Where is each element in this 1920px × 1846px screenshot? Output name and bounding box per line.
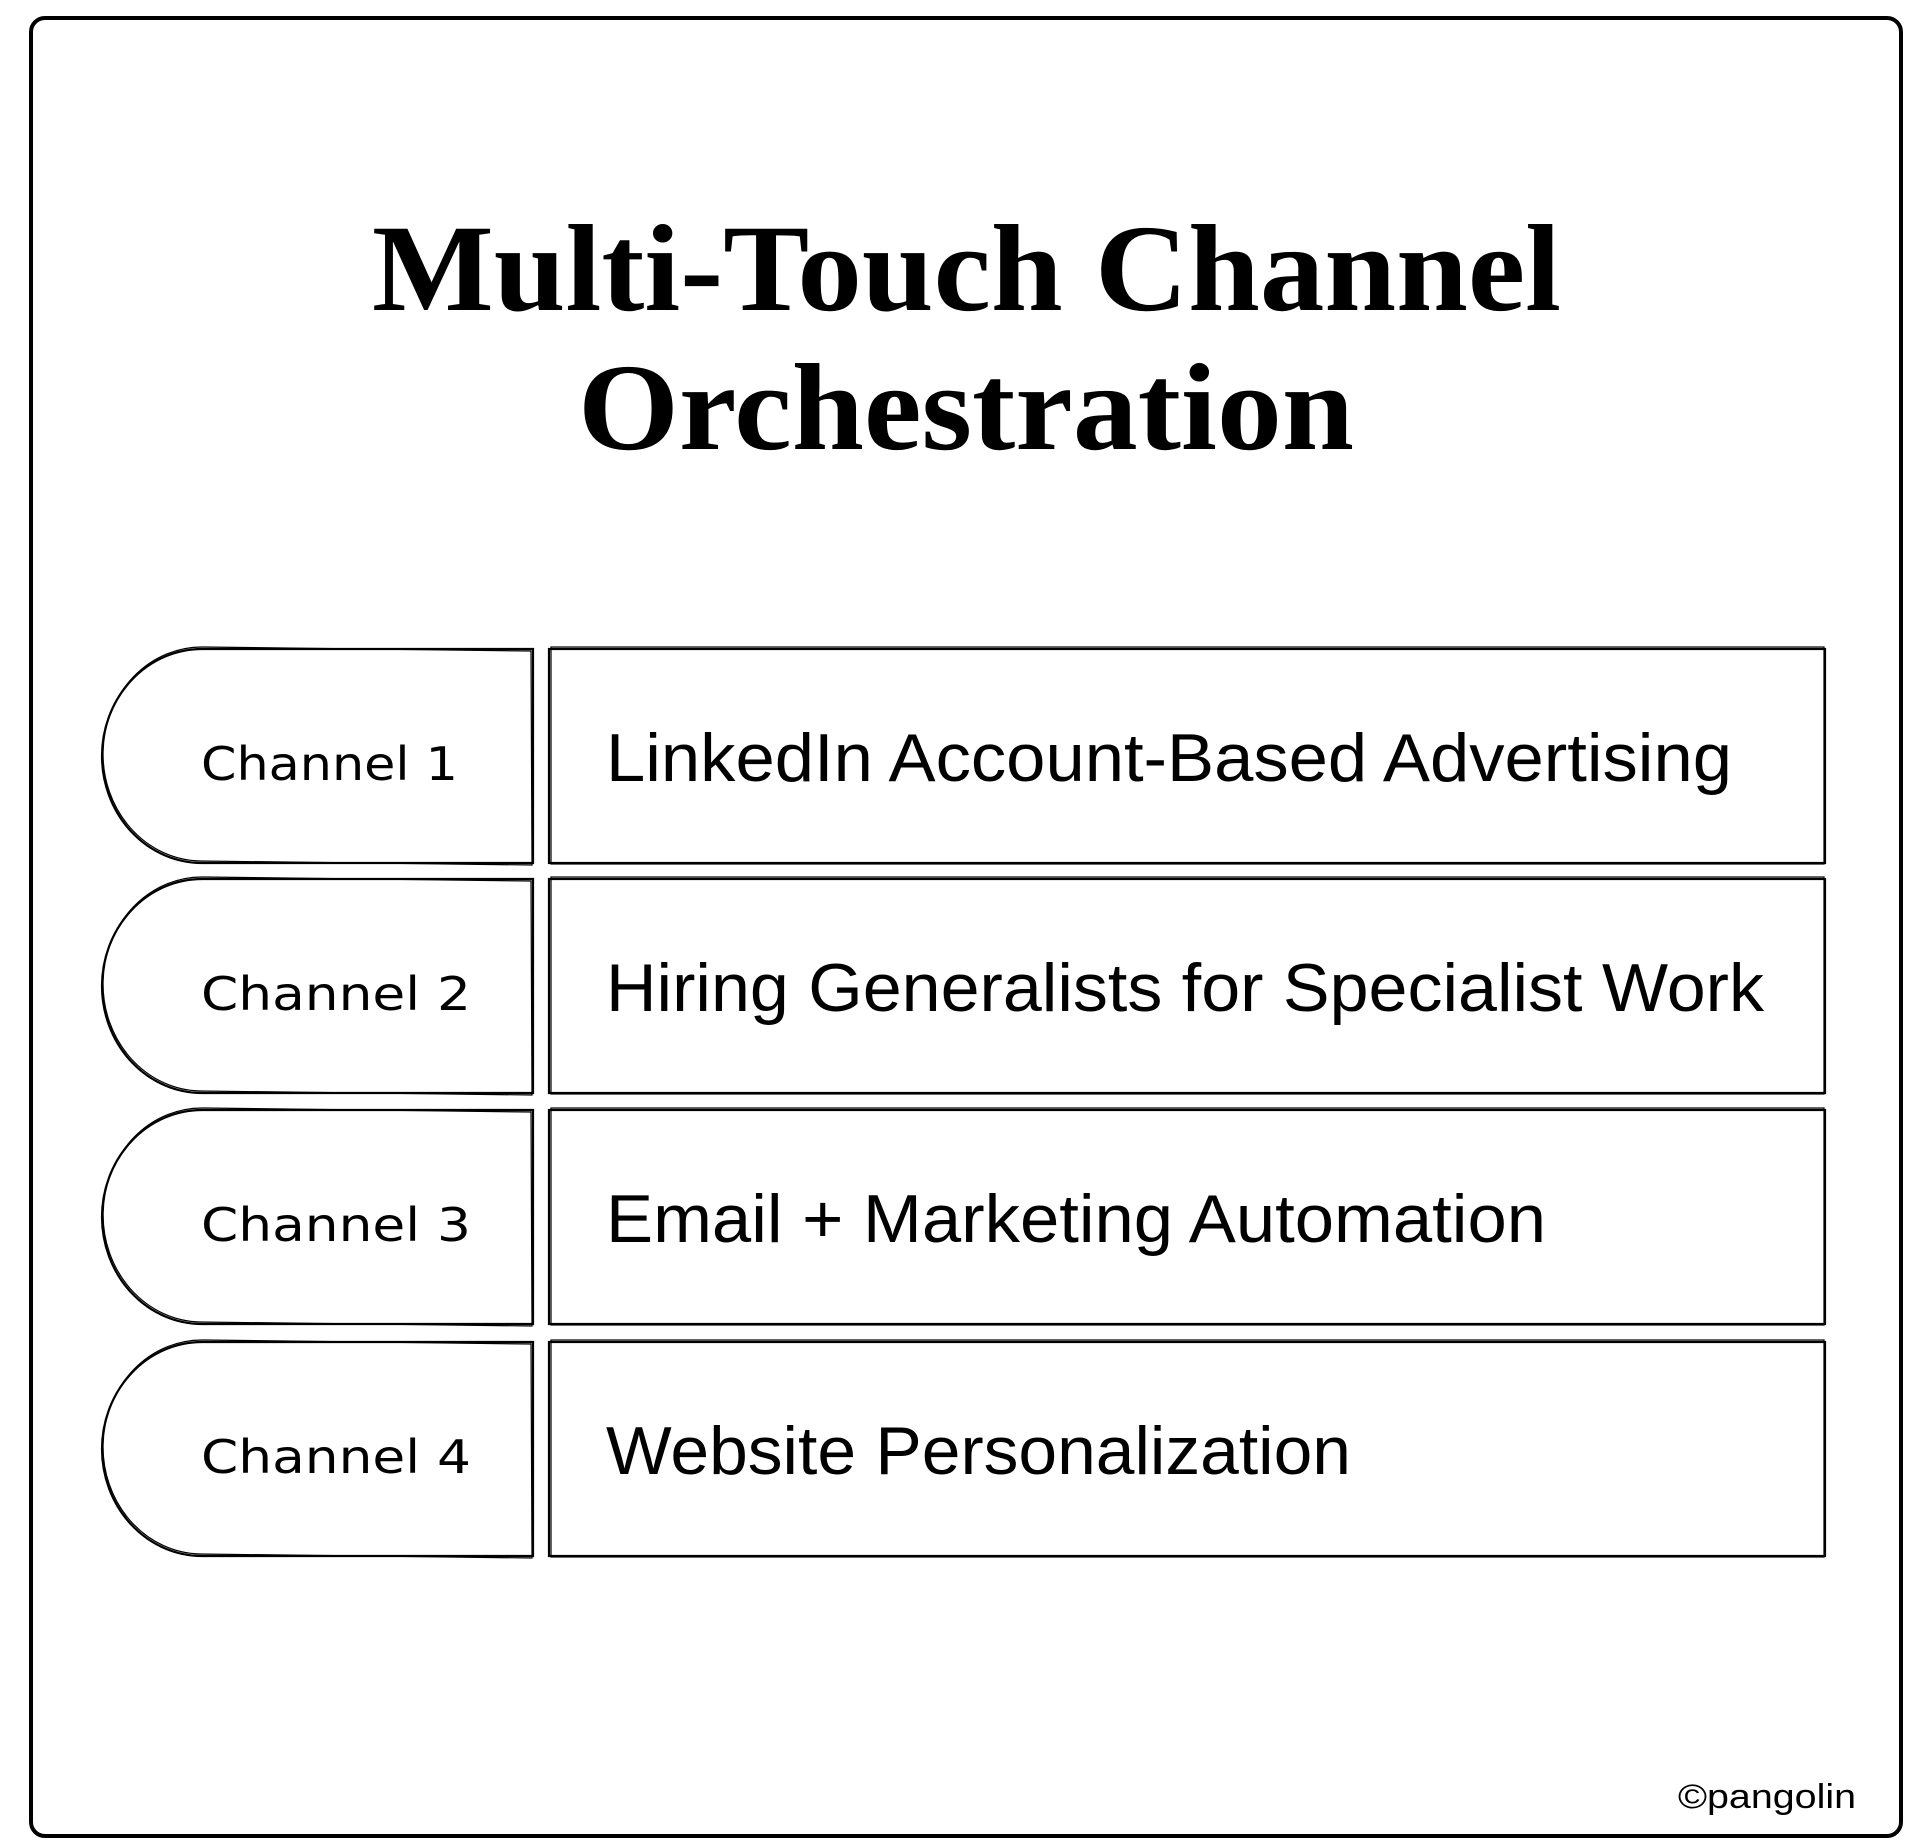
box: Email + Marketing Automation: Email + Marketing Automation	[606, 1181, 1546, 1257]
box: LinkedIn Account-Based Advertising	[549, 647, 1825, 864]
row 1	[102, 647, 1825, 865]
pill: channel 3: Channel 3	[201, 1198, 471, 1252]
box: Hiring Generalists: Hiring Generalists for Specialist Work	[606, 950, 1765, 1026]
pill: channel 1	[102, 647, 533, 865]
pill: channel 1: Channel 1	[201, 737, 458, 791]
pill: channel 2	[102, 877, 533, 1095]
row 4	[102, 1340, 1825, 1558]
pill: channel 4	[102, 1340, 533, 1558]
pill: channel 3	[102, 1108, 533, 1326]
title	[372, 200, 1561, 476]
box: Hiring Generalists	[549, 877, 1825, 1094]
box: Website Personalization	[549, 1340, 1825, 1557]
pill: channel 2: Channel 2	[201, 967, 471, 1021]
credit: ©pangolin	[1678, 1778, 1856, 1816]
row 3	[102, 1108, 1825, 1326]
box: Website Personalization: Website Personalization	[606, 1413, 1351, 1489]
row 2	[102, 877, 1825, 1095]
title: Orchestration	[578, 339, 1354, 476]
title: Multi-Touch Channel	[372, 200, 1561, 337]
pill: channel 4: Channel 4	[201, 1430, 471, 1484]
box: Email + Marketing Automation	[549, 1108, 1825, 1325]
box: LinkedIn Account-Based Advertising: LinkedIn Account-Based Advertising	[606, 720, 1732, 796]
